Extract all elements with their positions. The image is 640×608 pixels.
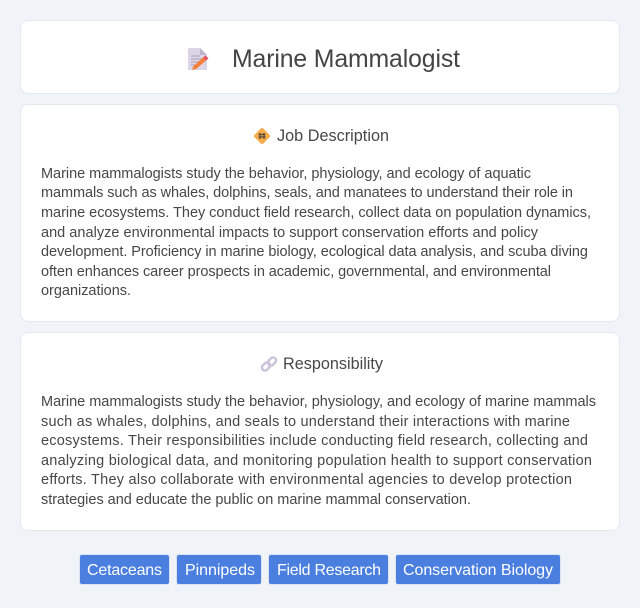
heading: job description: Job Description bbox=[277, 127, 389, 145]
panel: responsibility bbox=[20, 332, 620, 531]
icon: road sign bbox=[254, 128, 270, 144]
text: job description paragraph: mammals such as whales, dolphins, seals, and manatees to understand their role in bbox=[41, 185, 573, 201]
icon: document with pencil bbox=[188, 48, 208, 70]
text: responsibility paragraph: such as whales, dolphins, and seals to understand their interactions with marine bbox=[41, 414, 570, 430]
text: job description paragraph bbox=[41, 166, 591, 299]
tag: Cetaceans bbox=[79, 554, 170, 585]
panel: job description bbox=[20, 104, 620, 322]
title: Marine Mammalogist bbox=[232, 46, 460, 73]
text: job description paragraph: Marine mammalogists study the behavior, physiology, and ecology of aquatic bbox=[41, 166, 531, 182]
text: job description paragraph: development. Proficiency in marine biology, ecological data analysis, and scuba diving bbox=[41, 244, 588, 260]
text: responsibility paragraph bbox=[41, 394, 596, 508]
text: job description paragraph: organizations. bbox=[41, 283, 131, 299]
tag: Pinnipeds bbox=[176, 554, 262, 585]
heading: responsibility: Responsibility bbox=[283, 355, 384, 373]
tag: Cetaceans: Cetaceans bbox=[87, 562, 162, 579]
text: job description paragraph: and analyze environmental impacts to support conservation efforts and policy bbox=[41, 225, 539, 241]
icon: chain link bbox=[260, 356, 278, 372]
tag: Field Research bbox=[268, 554, 389, 585]
text: job description paragraph: often enhances career prospects in academic, governmental, and environmental bbox=[41, 264, 551, 280]
text: responsibility paragraph: analyzing biological data, and monitoring population health to support conservation bbox=[41, 453, 592, 469]
text: responsibility paragraph: Marine mammalogists study the behavior, physiology, and ecology of marine mammals bbox=[41, 394, 596, 410]
tag: Pinnipeds: Pinnipeds bbox=[185, 562, 255, 579]
tag: Conservation Biology bbox=[395, 554, 561, 585]
tag: Conservation Biology: Conservation Biology bbox=[403, 562, 553, 579]
text: responsibility paragraph: strategies and educate the public on marine mammal conservation. bbox=[41, 492, 471, 508]
text: responsibility paragraph: efforts. They also collaborate with environmental agencies to develop protection bbox=[41, 472, 572, 488]
text: job description paragraph: marine ecosystems. They conduct field research, collect data on population dynamics, bbox=[41, 205, 591, 221]
panel: header bbox=[20, 20, 620, 94]
text: responsibility paragraph: ecosystems. Their responsibilities include conducting field research, collecting and bbox=[41, 433, 588, 449]
tag: Field Research: Field Research bbox=[277, 562, 381, 579]
